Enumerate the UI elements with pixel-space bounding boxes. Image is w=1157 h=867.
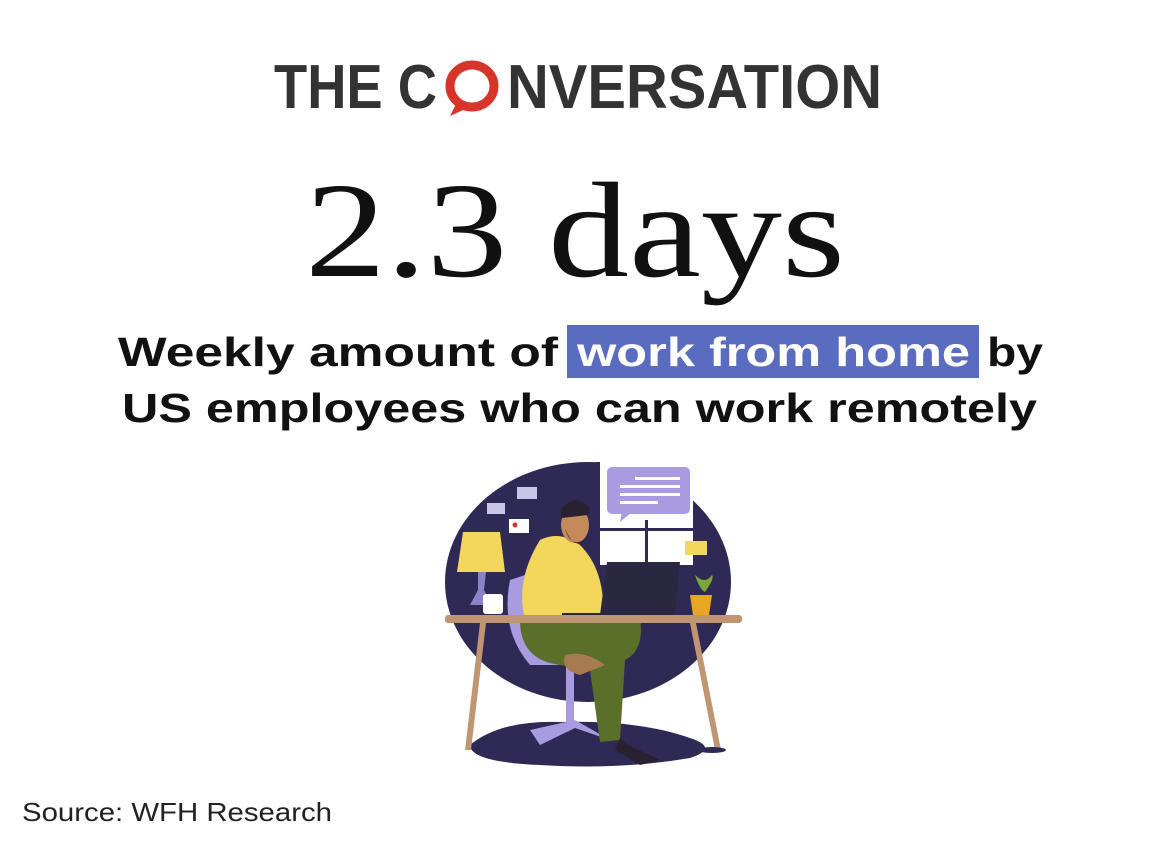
legs [520, 618, 641, 742]
logo: NVERSATION [507, 53, 882, 122]
window [597, 462, 693, 565]
desk [445, 615, 742, 750]
subtitle [118, 325, 1043, 431]
headline number: 2.3 days [305, 156, 845, 306]
lamp [457, 532, 505, 605]
logo: THE C [274, 53, 437, 122]
laptop [562, 562, 680, 617]
illustration: person working at desk [445, 462, 742, 766]
source: Source: WFH Research [22, 797, 332, 827]
subtitle: work from home [576, 329, 970, 375]
torso [522, 536, 603, 620]
dark circle background [445, 462, 731, 702]
subtitle: Weekly amount of [118, 329, 558, 375]
speech bubble [607, 467, 690, 522]
cup [483, 594, 503, 614]
floor shadow [470, 722, 705, 766]
head [560, 500, 590, 544]
highlight [567, 325, 979, 378]
chair [508, 570, 610, 745]
small icons [517, 487, 537, 499]
icon: speech bubble O [450, 65, 494, 116]
plant [690, 575, 713, 615]
subtitle: US employees who can work remotely [122, 385, 1037, 431]
logo [274, 53, 882, 122]
subtitle: by [987, 329, 1043, 375]
